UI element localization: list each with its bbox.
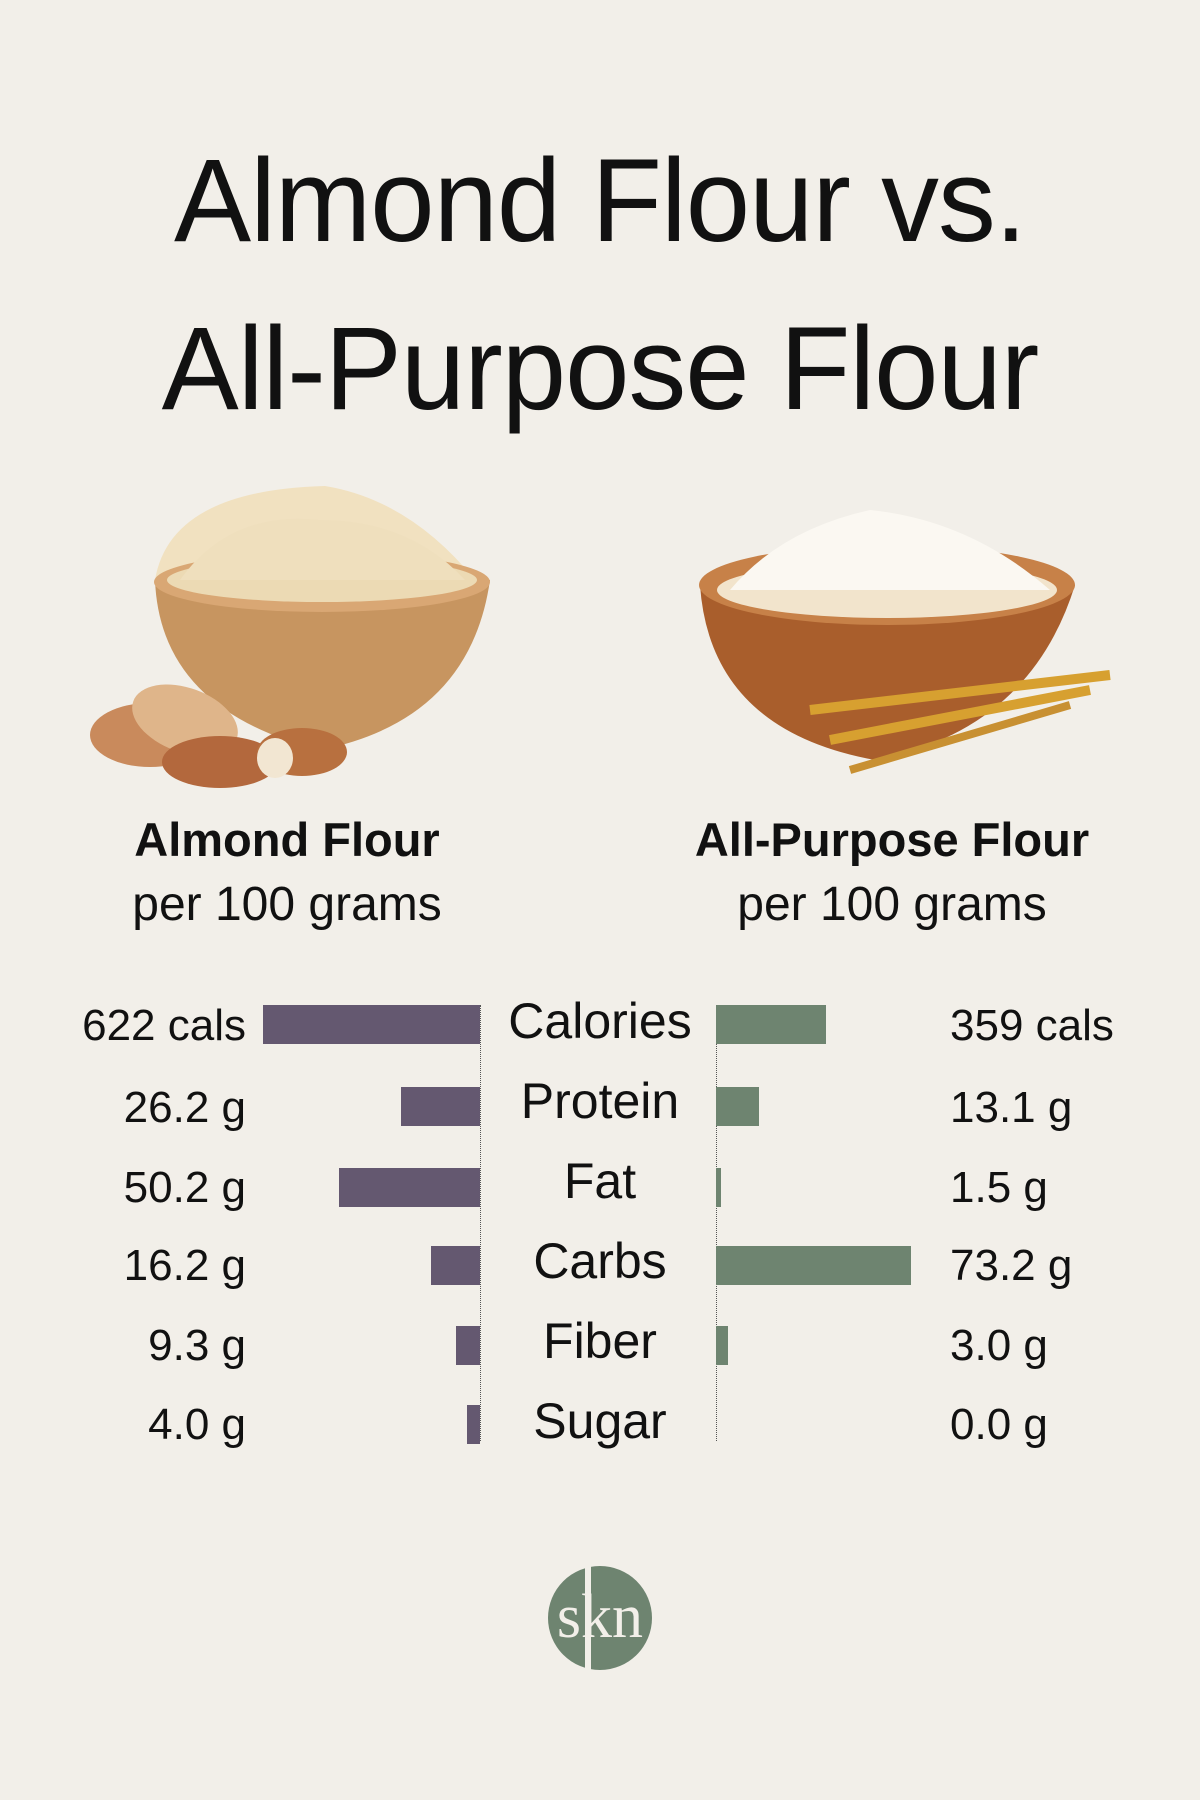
- title: [162, 135, 1038, 435]
- nutrient labels: Sugar: [533, 1393, 667, 1449]
- title: Almond Flour vs.: [174, 135, 1026, 267]
- left values: 50.2 g: [124, 1163, 246, 1212]
- left values: 26.2 g: [124, 1083, 246, 1132]
- label: all-purpose flour: [695, 813, 1089, 931]
- label: almond flour: [132, 813, 442, 931]
- label: all-purpose flour: All-Purpose Flour: [695, 813, 1089, 866]
- illustration: all-purpose flour bowl: [699, 510, 1111, 774]
- right values: [950, 1001, 1114, 1449]
- nutrient labels: Protein: [521, 1073, 679, 1129]
- left values: [82, 1001, 246, 1449]
- label: all-purpose flour: per 100 grams: [737, 878, 1047, 931]
- right values: 359 cals: [950, 1001, 1114, 1050]
- nutrient labels: Fat: [564, 1153, 636, 1209]
- right values: 0.0 g: [950, 1400, 1048, 1449]
- logo: [548, 1566, 652, 1670]
- right values: 1.5 g: [950, 1163, 1048, 1212]
- right values: 3.0 g: [950, 1321, 1048, 1370]
- left bars: [263, 1005, 480, 1444]
- logo: skn: [557, 1583, 643, 1651]
- left values: 4.0 g: [148, 1400, 246, 1449]
- right values: 13.1 g: [950, 1083, 1072, 1132]
- nutrient labels: [508, 993, 692, 1449]
- chart: nutrition comparison: [82, 993, 1114, 1449]
- right bars: [716, 1005, 911, 1365]
- nutrient labels: Fiber: [543, 1313, 657, 1369]
- left values: 16.2 g: [124, 1241, 246, 1290]
- left values: 622 cals: [82, 1001, 246, 1050]
- right values: 73.2 g: [950, 1241, 1072, 1290]
- nutrient labels: Carbs: [533, 1233, 667, 1289]
- label: almond flour: per 100 grams: [132, 878, 442, 931]
- title: All-Purpose Flour: [162, 303, 1038, 435]
- label: almond flour: Almond Flour: [134, 813, 440, 866]
- left values: 9.3 g: [148, 1321, 246, 1370]
- illustration: almond flour bowl: [90, 486, 490, 788]
- nutrient labels: Calories: [508, 993, 692, 1049]
